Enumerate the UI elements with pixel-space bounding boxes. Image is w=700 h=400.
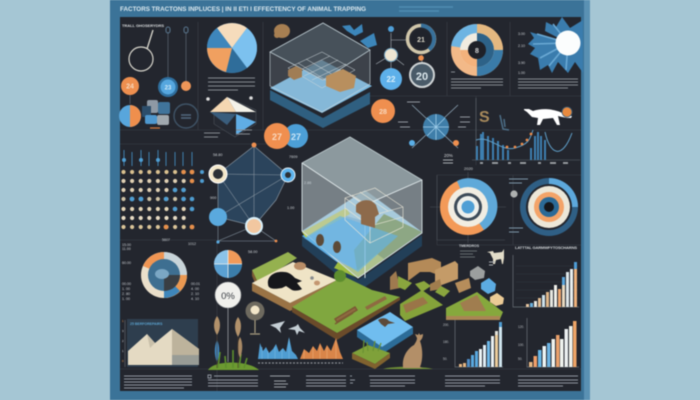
- footer block 7: [445, 376, 500, 386]
- diorama: green plate with logs: [446, 292, 503, 320]
- area chart blue: [258, 337, 298, 359]
- panel: trail observations: [119, 23, 198, 128]
- top node: [252, 142, 256, 148]
- grid dividers: [120, 22, 581, 391]
- hexagon caption: [204, 130, 252, 137]
- sunburst axis labels: 3.90: [518, 61, 525, 65]
- pie chart: [207, 23, 257, 73]
- dot: orange: [181, 81, 191, 91]
- white stat circle: 0%: [221, 291, 235, 302]
- radar labels: 900: [210, 196, 216, 200]
- flow nodes: [376, 26, 434, 90]
- mountain chart: 0: [122, 359, 124, 363]
- water showing through the glass: [304, 216, 398, 272]
- blue poster frame: [110, 0, 590, 400]
- footer block 6: [369, 376, 415, 386]
- donut labels: 5607: [162, 238, 170, 242]
- icon: cream gem: [490, 293, 504, 306]
- grey dial: [510, 190, 518, 198]
- trend line: [476, 130, 572, 151]
- donut labels: 00.01: [191, 282, 200, 286]
- inner wire cage: [345, 188, 403, 243]
- pie caption text: [208, 78, 255, 90]
- stat label: [443, 153, 453, 163]
- column whiskers: [124, 150, 192, 166]
- mountain chart: 25 BERFOREPAIRS: [130, 322, 163, 326]
- footer block 8: [518, 376, 578, 386]
- donut labels: 2. 10: [191, 292, 199, 296]
- bar chart: right upper: [513, 255, 579, 307]
- bottom corner dots: [216, 240, 220, 244]
- title: FACTORS TRACTONS INPLUCES | IN II ETI I EFFECTENCY OF ANIMAL TRAPPING: [120, 6, 366, 13]
- donut labels: 1012: [188, 242, 196, 246]
- gauge 20: 20: [416, 71, 428, 83]
- node blue right: [281, 168, 295, 182]
- icon: white animal: [524, 109, 572, 125]
- animal house: [356, 200, 379, 228]
- line chart with animal: [472, 98, 580, 160]
- area chart tick labels: [258, 362, 343, 364]
- ring icon: [174, 104, 198, 128]
- orange trend markers: [506, 133, 532, 148]
- plateau side: [252, 280, 337, 311]
- radar labels: [210, 153, 311, 254]
- orange link dot: [418, 55, 424, 61]
- radar labels: 7609: [289, 155, 297, 159]
- bar chart: right bottom: 50.: [518, 357, 523, 361]
- central glass cage: [302, 137, 422, 292]
- wire cage: [288, 52, 355, 88]
- lettal chart heading: LATTTAL GARMWFYTOSCHARNS: [515, 245, 577, 250]
- node cream: [209, 165, 227, 183]
- grass block behind: [252, 252, 297, 283]
- radar labels: 58.80: [213, 153, 223, 157]
- footer block 1: [124, 376, 192, 388]
- footer block 3: [270, 376, 290, 387]
- text beside heading: [459, 244, 480, 257]
- donut labels: [122, 238, 200, 301]
- donut labels: 4. 00: [191, 287, 199, 291]
- footer block 5: [350, 376, 355, 383]
- donut labels: 1. 00: [122, 297, 130, 301]
- right target labels: [509, 179, 528, 232]
- bar chart: right bottom: 120.: [518, 325, 524, 329]
- mountain chart: 1: [122, 319, 124, 323]
- stumps in water: [316, 234, 324, 246]
- half circle: [119, 105, 141, 127]
- sunburst axis labels: 1.00: [518, 71, 525, 75]
- footer block 4: [306, 376, 346, 386]
- node blue left: [209, 208, 227, 226]
- footer block 2: [208, 375, 258, 386]
- area chart orange: [300, 338, 343, 359]
- diorama: cream plateau: [252, 252, 337, 311]
- bar chart: right bottom: [518, 318, 579, 367]
- radar labels: 58.00: [248, 250, 258, 254]
- donut labels: 15.00: [122, 243, 131, 247]
- footer text blocks: [124, 375, 578, 388]
- small ring tops: [166, 27, 188, 33]
- icon: light bulb: [246, 302, 264, 334]
- radar labels: 1.00: [287, 206, 294, 210]
- icon: grey gem: [470, 266, 485, 280]
- coloured dots: [130, 170, 204, 211]
- isometric trap box: top: [270, 23, 372, 128]
- diorama: water block: [357, 312, 413, 354]
- icon: reeds and grass: [208, 316, 259, 370]
- icon: birds in flight: [270, 321, 305, 335]
- radar labels: 2.86: [304, 181, 311, 185]
- small animal silhouette: [500, 115, 509, 130]
- box base: [270, 90, 370, 128]
- target chart right: [520, 178, 578, 236]
- cubes caption: [150, 127, 160, 129]
- icon: small horse: [487, 249, 504, 264]
- icon: kangaroo: [383, 333, 433, 369]
- icon: blue gem: [481, 278, 496, 294]
- chart tick labels: [480, 162, 568, 164]
- icon: spiky seed: [274, 24, 290, 38]
- dark poster panel: [120, 17, 581, 391]
- stem lines: [130, 32, 186, 104]
- cage base: [302, 235, 422, 292]
- donut labels: 60.00: [122, 261, 131, 265]
- orange circle 28: [371, 99, 395, 123]
- dot matrix chart: [122, 150, 204, 229]
- icon: magnifier: [129, 30, 153, 71]
- donut labels: 2. 80: [122, 292, 130, 296]
- radar polygon: [218, 146, 288, 226]
- cage glass walls: [302, 137, 422, 278]
- sunburst axis labels: [518, 32, 525, 75]
- connector lines: [376, 33, 422, 70]
- diorama: green slab: [292, 270, 400, 340]
- label beside gems: [489, 262, 495, 265]
- gauge 21: 21: [417, 37, 425, 44]
- duo circles 27: 27: [272, 132, 282, 142]
- header subtitle bars: [399, 7, 453, 11]
- diorama: grass block: [352, 340, 390, 369]
- diorama: brown rock blocks: [390, 258, 471, 293]
- text beside heading: TMERDROS: [459, 244, 480, 248]
- label: trail heading: TRALL GHOSERYDRS: [122, 23, 164, 28]
- icon: birds: [342, 24, 377, 48]
- mountain chart: 3: [122, 329, 124, 333]
- duo circles 27: [264, 123, 308, 149]
- icon: black animal: [268, 272, 302, 291]
- donut labels: 00.00: [122, 282, 131, 286]
- donut labels: 1. 00: [122, 287, 130, 291]
- duo circles 27: 27: [291, 132, 301, 142]
- top blue dot: [388, 26, 394, 32]
- target caption: 2020: [464, 166, 474, 171]
- flower node: [384, 48, 398, 62]
- sunburst caption text: [518, 79, 578, 88]
- chart axes: [472, 98, 580, 160]
- bar chart: centre bottom: 180.: [443, 340, 449, 344]
- donut caption text: [451, 72, 503, 88]
- circle: 24: 24: [126, 84, 134, 90]
- stat label: 20%: [444, 153, 453, 158]
- bar chart: centre bottom: [443, 320, 503, 367]
- mountain chart: 2: [122, 339, 124, 343]
- bar chart: centre bottom: 200.: [443, 323, 449, 327]
- sunburst axis labels: 3.00: [518, 32, 525, 36]
- bar chart: right bottom: 100.: [518, 343, 524, 347]
- donut labels: 4. 10: [191, 297, 199, 301]
- hexagon diagram: [206, 96, 256, 137]
- plateau top: [252, 262, 337, 303]
- cross hairs: [430, 172, 506, 243]
- target chart centre: [430, 172, 506, 243]
- donut chart top: [451, 24, 503, 76]
- small pie: [214, 250, 242, 278]
- node bottom: [246, 218, 262, 234]
- bottom left donut: [141, 252, 187, 298]
- mountain chart: 1: [122, 349, 124, 353]
- donut labels: 11.00: [122, 247, 131, 251]
- sunburst: [528, 17, 583, 73]
- bar chart: centre bottom: 50.: [443, 357, 448, 361]
- donut chart top: 8: [475, 48, 479, 55]
- mountain chart: [122, 319, 199, 367]
- glyph S: S: [479, 109, 490, 126]
- dot rows: [124, 172, 192, 227]
- icon: cubes: [142, 100, 170, 125]
- animal in box: [288, 66, 302, 80]
- white stat circle: [215, 282, 241, 362]
- box glass walls: [270, 23, 370, 112]
- crate: [326, 69, 356, 92]
- starburst labels: [398, 102, 470, 127]
- blue bars: [477, 132, 545, 160]
- blue circle 22: 22: [387, 75, 396, 84]
- starburst diagram: [409, 105, 459, 148]
- diorama: wooden plate: [400, 286, 450, 321]
- orange dot: [562, 107, 572, 117]
- circle: 23: 23: [165, 86, 172, 92]
- sunburst axis labels: 2.10: [518, 44, 525, 48]
- stones: [294, 262, 306, 270]
- orange circle 28: 28: [379, 109, 387, 116]
- radar diagram: [209, 142, 295, 244]
